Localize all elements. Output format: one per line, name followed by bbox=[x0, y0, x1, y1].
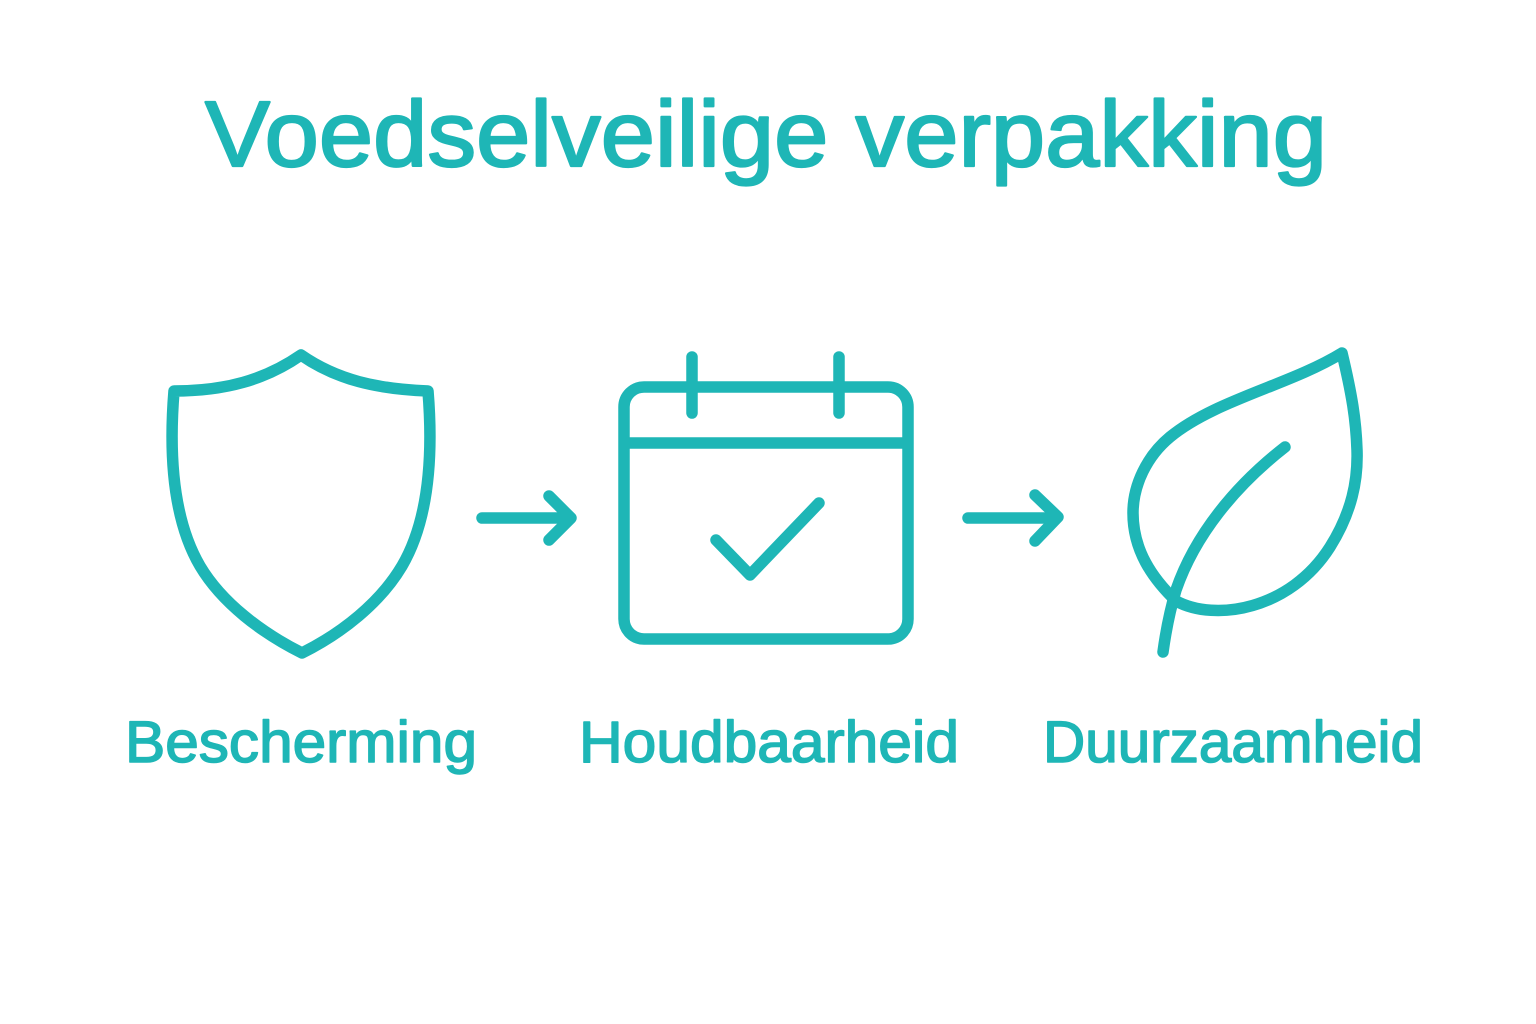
arrow: shield to calendar bbox=[482, 496, 571, 540]
label: Bescherming: Bescherming bbox=[125, 710, 477, 775]
icon: calendar with check bbox=[624, 357, 908, 639]
label: Duurzaamheid: Duurzaamheid bbox=[1043, 710, 1423, 775]
icon: shield bbox=[172, 355, 430, 653]
arrow: calendar to leaf bbox=[968, 495, 1058, 541]
icon: leaf bbox=[1133, 353, 1357, 652]
label: Houdbaarheid: Houdbaarheid bbox=[579, 710, 959, 775]
title: Voedselveilige verpakking bbox=[205, 82, 1327, 186]
